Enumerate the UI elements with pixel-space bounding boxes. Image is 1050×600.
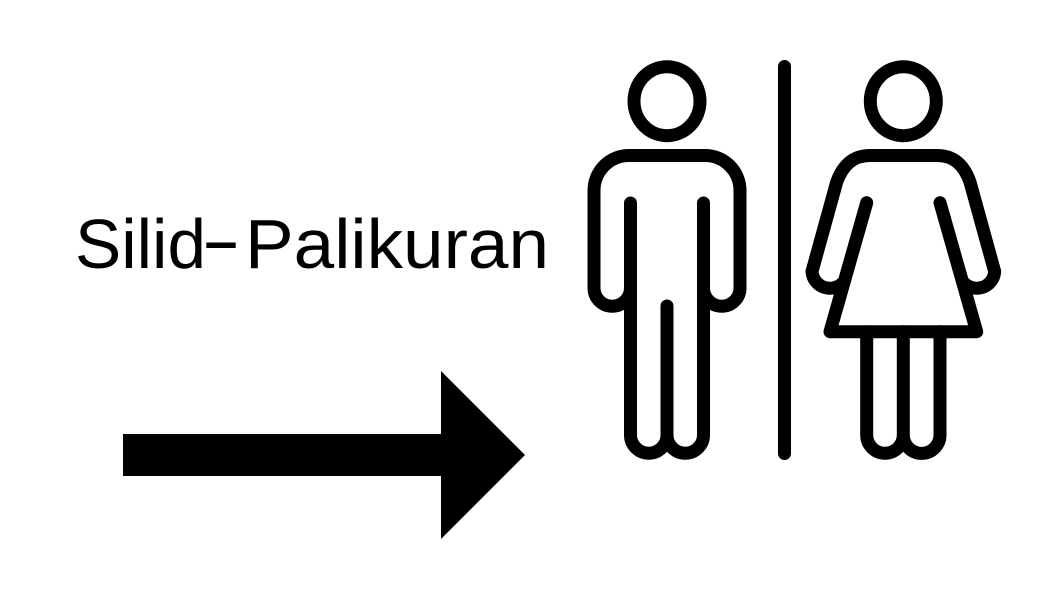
label: Silid-Palikuran: [75, 201, 549, 283]
icon: man: [594, 67, 740, 453]
label: Silid-Palikuran: Silid: [75, 205, 206, 283]
arrow pointing right: [123, 371, 525, 539]
label: Silid-Palikuran: Palikuran: [245, 205, 549, 283]
divider line: [778, 60, 791, 460]
icon: woman: [812, 67, 995, 453]
label: Silid-Palikuran: -: [201, 201, 241, 279]
